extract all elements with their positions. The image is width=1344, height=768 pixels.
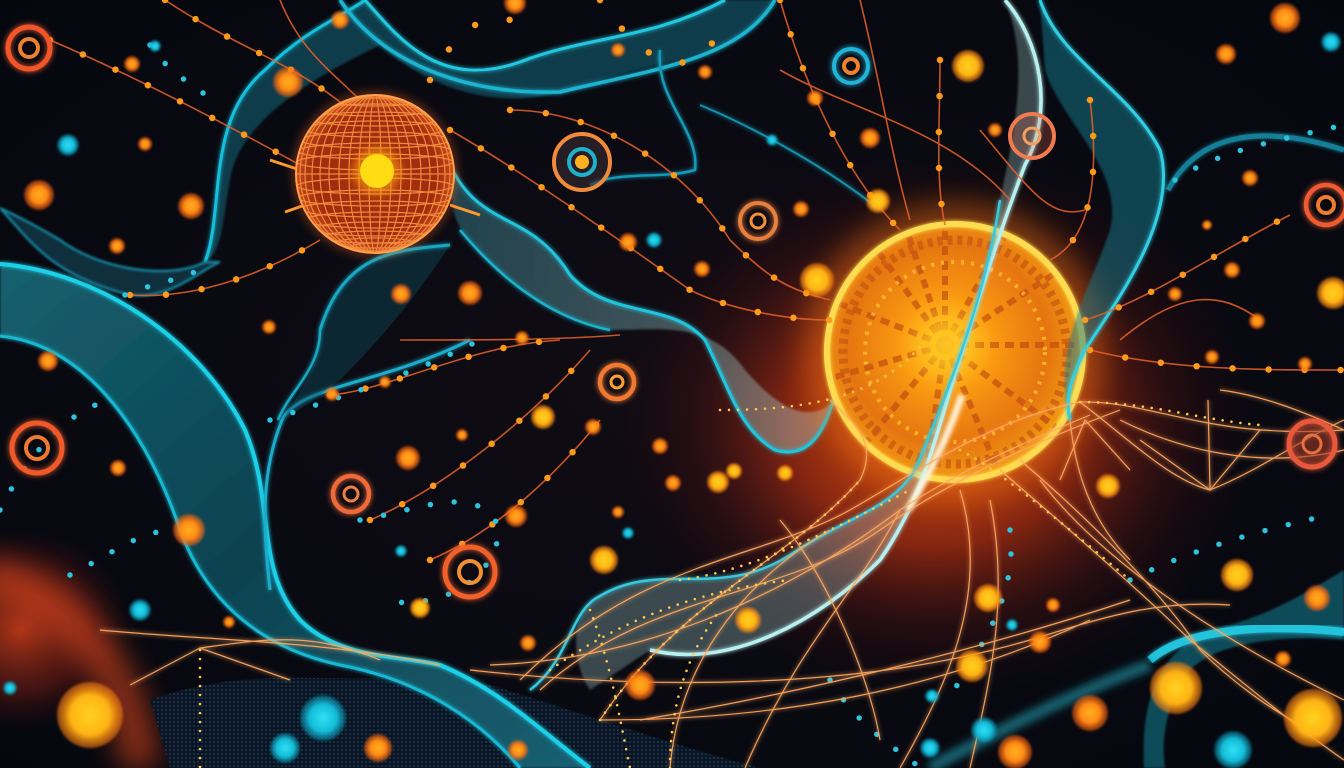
orange strands with bead dots bbox=[50, 0, 1344, 560]
ring nodes bbox=[8, 27, 1344, 597]
red glow bottom left bbox=[0, 530, 140, 768]
dark mesh wave bottom bbox=[150, 672, 760, 768]
ribbon: right tall translucent band over sphere bbox=[530, 0, 1164, 690]
ribbon: far right sweeping band bbox=[1168, 136, 1344, 190]
fine white-orange web lower right bbox=[100, 390, 1344, 768]
yellow dotted web strands bbox=[200, 340, 1260, 768]
ribbon: big left cyan band bbox=[0, 264, 590, 768]
orange heat glow around large sphere bbox=[615, 155, 1255, 695]
ribbon: left edge band bbox=[0, 208, 220, 296]
ribbon: middle translucent band bbox=[278, 165, 835, 452]
ribbon: upper left cyan band bbox=[205, 0, 880, 262]
mesh sphere bbox=[270, 90, 480, 258]
large glowing sphere bbox=[805, 202, 1105, 502]
ribbon: bottom right cyan band bbox=[930, 570, 1344, 768]
